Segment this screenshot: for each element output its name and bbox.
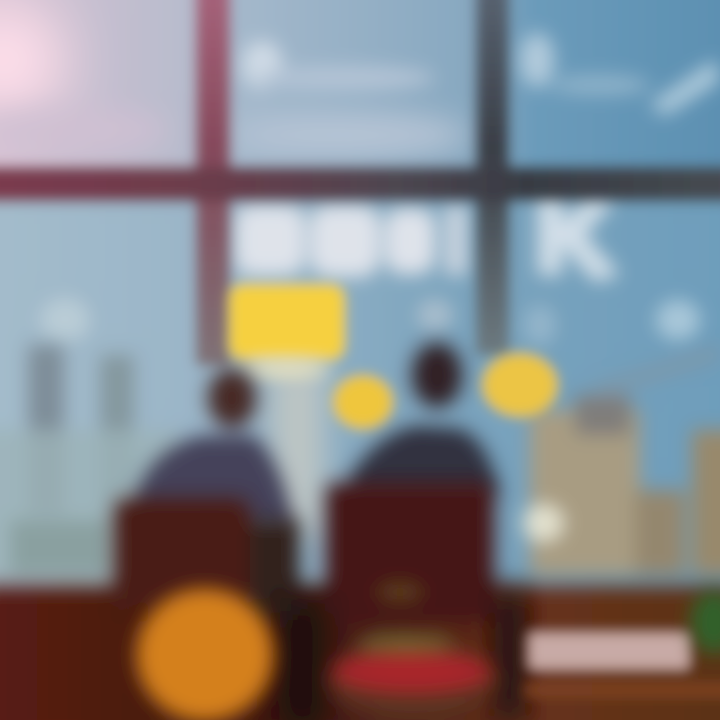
horizontal beam (0, 167, 720, 201)
vertical post left (196, 0, 230, 365)
clouds lower (40, 298, 700, 345)
green plant (690, 590, 720, 654)
lamp right (482, 353, 558, 417)
blurred white lettering (235, 195, 620, 282)
person left (135, 368, 295, 530)
lamp glow (240, 358, 330, 378)
person right (350, 342, 500, 495)
right city towers (523, 345, 720, 575)
lamp small (333, 375, 393, 429)
center pale column (270, 365, 325, 535)
white napkin (528, 632, 690, 670)
red plate with food (328, 582, 496, 720)
table dark gap (280, 600, 325, 720)
pendant lamps (229, 284, 558, 429)
orange plate (137, 589, 273, 720)
lamp large (229, 284, 345, 360)
table edge right (525, 682, 720, 698)
left city towers (0, 345, 180, 580)
table (0, 585, 720, 720)
chairs (113, 482, 495, 622)
clouds upper (242, 33, 720, 115)
window frame (0, 0, 720, 365)
vertical post right (476, 0, 509, 355)
